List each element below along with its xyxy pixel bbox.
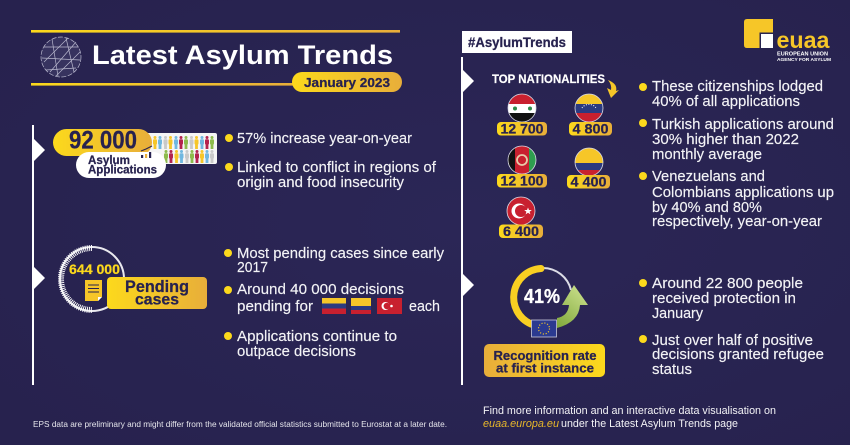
recognition label bbox=[484, 344, 605, 377]
logo: euaa: euaa bbox=[776, 27, 830, 53]
icon: curved arrow bbox=[607, 80, 619, 98]
date pill bbox=[292, 72, 402, 92]
bullets: pending: each bbox=[409, 298, 440, 315]
bullets: pending: Around 40 000 decisions bbox=[237, 281, 404, 298]
flag: Venezuela bbox=[322, 298, 346, 314]
bullets: pending: pending for bbox=[237, 298, 313, 315]
pending label: Pending bbox=[125, 277, 189, 296]
bullets: pending: 2017 bbox=[237, 259, 268, 276]
more information note: Find more information and an interactive data visualisation on bbox=[483, 405, 776, 417]
flag: Venezuela with count bbox=[569, 94, 612, 136]
percentage: 41% bbox=[524, 286, 560, 308]
bullets: applications: 57% increase year-on-year bbox=[237, 130, 412, 147]
label pill bbox=[76, 152, 166, 178]
logo: euaa bbox=[744, 19, 831, 63]
flag: Turkey bbox=[377, 298, 402, 314]
icon: globe bbox=[41, 37, 81, 77]
bullets: nationalities: monthly average bbox=[652, 146, 762, 163]
flag: Venezuela with count: 4 800 bbox=[572, 120, 609, 136]
more information note: euaa.europa.eu bbox=[483, 418, 559, 430]
pending count: 644 000 bbox=[69, 262, 120, 277]
bullets: nationalities: Turkish applications around bbox=[652, 116, 834, 133]
pending figure bbox=[60, 247, 207, 311]
flag: Colombia with count: 4 400 bbox=[570, 174, 607, 190]
more information note: under the Latest Asylum Trends page bbox=[561, 418, 738, 430]
bullets: recognition bbox=[639, 275, 824, 378]
flag: Afghanistan with count: 12 100 bbox=[500, 172, 544, 188]
hashtag label: #AsylumTrends bbox=[468, 35, 566, 50]
label pill: Asylum bbox=[88, 153, 130, 167]
recognition label: at first instance bbox=[496, 360, 594, 376]
bullets: nationalities: 30% higher than 2022 bbox=[652, 131, 799, 148]
flag: Turkey with count bbox=[499, 197, 543, 239]
recognition rate figure bbox=[484, 268, 605, 377]
gauge ring bbox=[60, 247, 124, 311]
icon: rising chart bbox=[141, 146, 152, 158]
bullets: applications: Linked to conflict in regions of bbox=[237, 159, 437, 176]
bullets: recognition: received protection in bbox=[652, 290, 796, 307]
bullets: recognition: Just over half of positive bbox=[652, 332, 813, 349]
bullets: nationalities: 40% of all applications bbox=[652, 93, 800, 110]
bullets: nationalities: by 40% and 80% bbox=[652, 199, 762, 216]
bullets: pending: Applications continue to bbox=[237, 328, 397, 345]
people panel bbox=[145, 133, 217, 164]
pending label bbox=[107, 277, 207, 309]
recognition label: Recognition rate bbox=[494, 348, 596, 363]
more information note bbox=[483, 405, 776, 430]
bullets: pending bbox=[224, 245, 444, 360]
bullets: pending: Most pending cases since early bbox=[237, 245, 444, 262]
left timeline bbox=[32, 125, 45, 385]
right timeline bbox=[461, 57, 474, 385]
top nationalities heading: TOP NATIONALITIES bbox=[492, 72, 605, 86]
flag: Syria with count bbox=[497, 94, 547, 136]
icon: EU flag bbox=[532, 320, 556, 337]
footnote: EPS data are preliminary and might differ from the validated official statistics submitted to Eurostat at a later date. bbox=[33, 419, 447, 429]
title block bbox=[31, 30, 402, 92]
bullets: recognition: January bbox=[652, 305, 703, 322]
pending label: cases bbox=[135, 292, 179, 308]
date pill: January 2023 bbox=[304, 76, 390, 90]
hashtag label bbox=[462, 31, 572, 53]
ring chart bbox=[514, 268, 571, 324]
title text: Latest Asylum Trends bbox=[92, 40, 393, 70]
flag: Colombia bbox=[351, 298, 371, 314]
bullets: recognition: decisions granted refugee bbox=[652, 346, 824, 363]
flag: Turkey with count: 6 400 bbox=[503, 223, 539, 239]
bullets: pending: outpace decisions bbox=[237, 343, 356, 360]
bullets: nationalities: Venezuelans and bbox=[652, 168, 765, 185]
bullets: nationalities: respectively, year-on-year bbox=[652, 213, 822, 230]
bullets: recognition: status bbox=[652, 361, 692, 378]
bullets: nationalities: These citizenships lodged bbox=[652, 78, 823, 95]
bullets: applications: origin and food insecurity bbox=[237, 174, 405, 191]
flag: Afghanistan with count bbox=[497, 146, 547, 188]
bullets: nationalities bbox=[639, 78, 834, 230]
bullets: nationalities: Colombians applications up bbox=[652, 184, 834, 201]
bullets: applications bbox=[225, 130, 437, 191]
logo: euaa: EUROPEAN UNION bbox=[777, 52, 828, 58]
logo: euaa: AGENCY FOR ASYLUM bbox=[777, 57, 831, 63]
bullets: recognition: Around 22 800 people bbox=[652, 275, 803, 292]
label pill: Applications bbox=[88, 162, 157, 176]
flag: Syria with count: 12 700 bbox=[500, 120, 544, 136]
flag: Colombia with count bbox=[567, 148, 610, 190]
icon: document bbox=[85, 280, 102, 301]
applications figure bbox=[53, 126, 217, 178]
number pill: 92 000 bbox=[69, 126, 137, 154]
icon: green arrow bbox=[557, 285, 588, 328]
